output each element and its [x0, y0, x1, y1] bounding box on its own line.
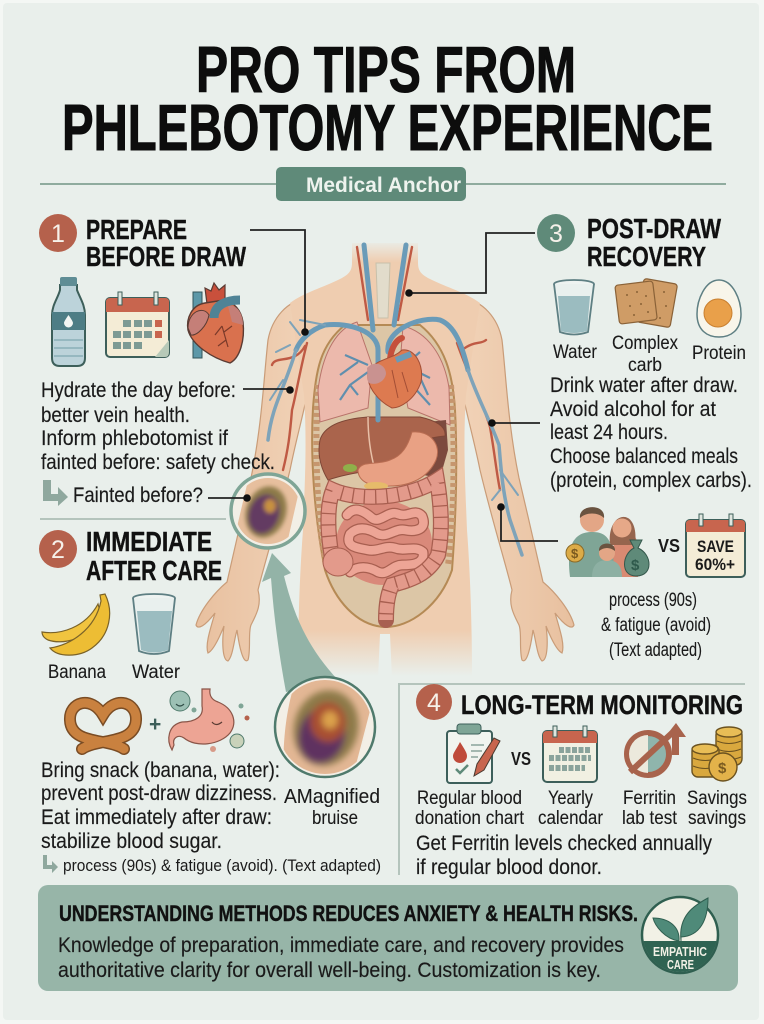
body text 4: if regular blood donor.: [416, 856, 602, 879]
step badge 3: [537, 214, 575, 252]
icon: stomach: [169, 689, 250, 752]
body text 4: Get Ferritin levels checked annually: [416, 832, 712, 855]
heading 1: PREPARE: [86, 214, 187, 245]
step badge 2: [39, 530, 77, 568]
caption: process fatigue: (Text adapted): [609, 640, 702, 661]
heading 2: [86, 526, 222, 586]
text vs: VS: [658, 536, 680, 556]
body text 2: prevent post-draw dizziness.: [41, 782, 277, 805]
labels banana water: [48, 662, 181, 683]
heading 3: POST-DRAW: [587, 213, 721, 244]
labels 4: calendar: [538, 808, 604, 829]
large intestine: [323, 480, 441, 620]
trachea: [376, 263, 390, 318]
body text 2: [41, 759, 280, 853]
body text 1: Hydrate the day before:: [41, 379, 236, 402]
caption: process fatigue: & fatigue (avoid): [601, 615, 711, 636]
blood vessels: [268, 245, 522, 555]
anatomy figure: [196, 243, 574, 678]
icon: crackers: [615, 278, 678, 328]
body text 2: Eat immediately after draw:: [41, 806, 272, 829]
note: process: process (90s) & fatigue (avoid). (Text adapted): [63, 856, 381, 875]
step badge 4: 4: [427, 689, 441, 717]
body text 2: Bring snack (banana, water):: [41, 759, 280, 782]
icon: water bottle: [52, 277, 85, 366]
summary text: authoritative clarity for overall well-being. Customization is key.: [58, 959, 601, 982]
labels 4: Savings: [687, 788, 747, 809]
heading 1: [86, 214, 246, 272]
icon: save calendar: SAVE: [697, 537, 734, 556]
heading 2: AFTER CARE: [86, 555, 222, 586]
badge: empathic care: [640, 897, 720, 981]
panel 3: post-draw recovery: [537, 213, 752, 661]
labels 3: carb: [628, 355, 662, 376]
icon: family with money: [566, 507, 649, 577]
heading 3: RECOVERY: [587, 241, 706, 272]
stomach: [358, 432, 438, 486]
labels 4: Yearly: [548, 788, 593, 809]
body text 3: least 24 hours.: [550, 421, 668, 444]
labels 3: Water: [553, 342, 598, 363]
icon: egg: [697, 280, 741, 337]
icon: donation chart: [447, 724, 500, 783]
icon: family with money: $: [571, 546, 579, 561]
summary text: [58, 934, 624, 982]
note: fainted before: Fainted before?: [73, 484, 203, 507]
banner: medical anchor: [40, 167, 726, 201]
body text 1: Inform phlebotomist if: [41, 427, 228, 450]
banner: medical anchor: Medical Anchor: [306, 174, 461, 197]
body text 4: [416, 832, 712, 879]
caption: process fatigue: [601, 590, 711, 661]
heart: [367, 350, 422, 408]
label: magnified bruise: bruise: [312, 808, 358, 829]
labels 4: lab test: [622, 808, 678, 829]
step badge 3: 3: [549, 220, 563, 248]
labels 4: Regular blood: [417, 788, 522, 809]
summary heading: UNDERSTANDING METHODS REDUCES ANXIETY & HEALTH RISKS.: [59, 901, 638, 926]
icon: calendar: [106, 292, 169, 357]
step badge 1: [39, 214, 77, 252]
small intestine: [336, 501, 432, 585]
caption: process fatigue: process (90s): [609, 590, 697, 611]
body text 1: [41, 379, 275, 474]
labels banana water: Water: [132, 662, 181, 683]
body text 1: fainted before: safety check.: [41, 451, 275, 474]
callout: fainted pointer: [208, 494, 251, 502]
label: magnified bruise: AMagnified: [284, 786, 380, 808]
badge: empathic care: EMPATHIC: [653, 944, 707, 959]
labels banana water: Banana: [48, 662, 106, 683]
text vs 2: VS: [511, 749, 531, 769]
summary text: Knowledge of preparation, immediate care, and recovery provides: [58, 934, 624, 957]
icon: yearly calendar: [543, 726, 597, 782]
heading 3: [587, 213, 721, 272]
icon: pretzel: [70, 703, 136, 749]
heading 2: IMMEDIATE: [86, 526, 212, 557]
panel 1: prepare before draw: [39, 214, 275, 507]
labels 3: Protein: [692, 343, 746, 364]
body text 3: Drink water after draw.: [550, 374, 738, 397]
step badge 2: 2: [51, 536, 65, 564]
magnified bruise circle: [275, 677, 378, 780]
body cavity: [312, 325, 456, 627]
icon: coins: [692, 727, 742, 781]
labels 4: Ferritin: [623, 788, 676, 809]
panel 4: long-term monitoring: [415, 684, 747, 879]
icon: banana: [42, 594, 110, 655]
labels 4: donation chart: [415, 808, 525, 829]
body text 2: stabilize blood sugar.: [41, 830, 222, 853]
note: fainted before: [43, 480, 203, 507]
icon: save calendar: [686, 514, 745, 577]
icon: coins: $: [718, 760, 727, 777]
icon: glass of water: [133, 594, 175, 654]
bottom summary panel: [38, 885, 738, 991]
heading 1: BEFORE DRAW: [86, 241, 246, 272]
badge: empathic care: CARE: [667, 957, 694, 972]
plus sign: +: [149, 713, 161, 736]
icon: heart: [188, 283, 243, 363]
divider lines panel 4: [399, 684, 745, 875]
liver: [395, 420, 448, 478]
panel 2: immediate after care: [39, 526, 381, 875]
labels 4: savings: [688, 808, 746, 829]
body silhouette: [196, 243, 574, 678]
label: magnified bruise: [284, 786, 380, 829]
labels 3: [553, 333, 746, 376]
lungs: [318, 322, 450, 425]
arrow to magnified bruise: [262, 553, 338, 692]
step badge 1: 1: [51, 220, 65, 248]
icon: save calendar: 60%+: [695, 555, 735, 574]
body text 3: [550, 374, 752, 492]
bruise lens on arm: [231, 472, 305, 548]
step badge 4: [416, 684, 452, 720]
labels 3: Complex: [612, 333, 678, 354]
gallbladder: [343, 464, 357, 472]
icon: water glass: [554, 280, 594, 334]
icon: ferritin lab test: [627, 723, 686, 775]
body text 3: Avoid alcohol for at: [550, 398, 716, 421]
title: PRO TIPS FROM: [196, 33, 576, 106]
labels 4: [415, 788, 747, 829]
icon: family with money: $: [631, 557, 640, 574]
title: [62, 33, 713, 164]
body text 1: better vein health.: [41, 404, 190, 427]
callout lines: [243, 230, 558, 541]
